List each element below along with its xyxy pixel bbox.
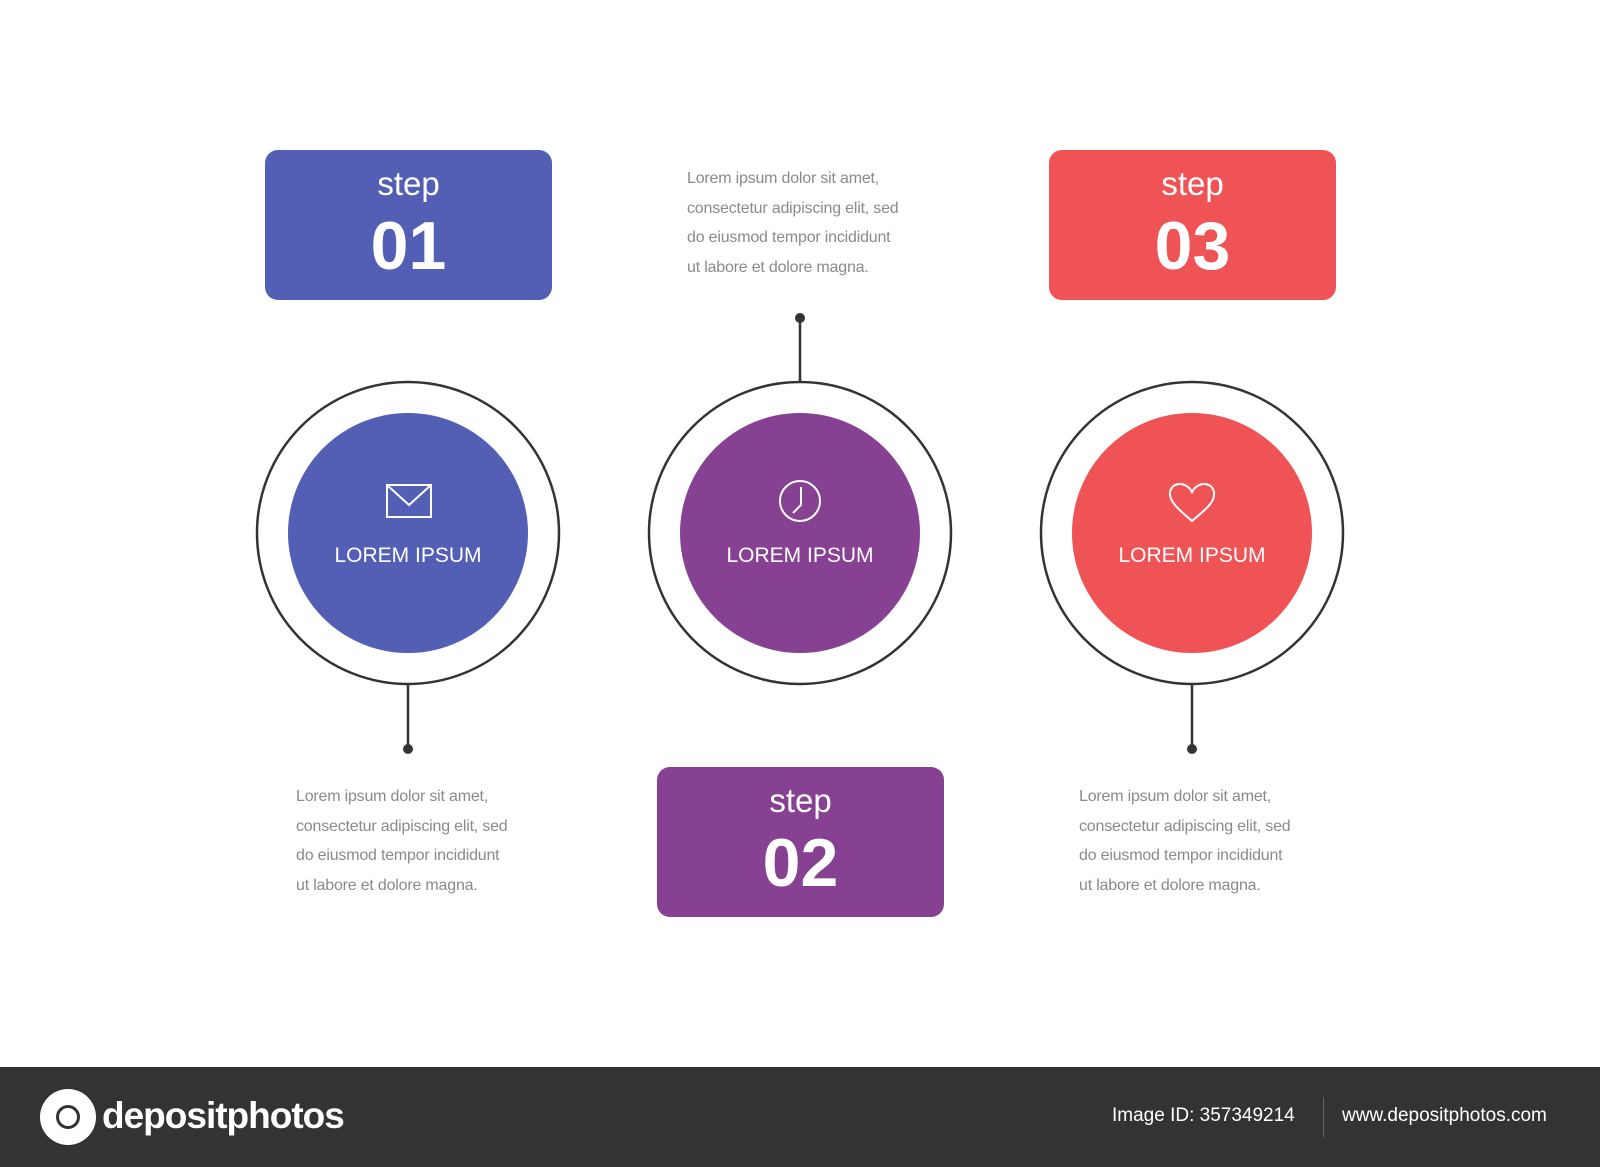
circle 1 <box>257 382 559 754</box>
step 01 box <box>265 150 552 300</box>
circle 2: LOREM IPSUM <box>726 544 874 567</box>
logo: depositphotos <box>102 1095 344 1136</box>
circle 3 <box>1041 382 1343 754</box>
text: right bottom: Lorem ipsum dolor sit amet, <box>1079 788 1271 805</box>
text: middle top: ut labore et dolore magna. <box>687 258 869 276</box>
text: right bottom <box>1079 788 1290 894</box>
text: right bottom: do eiusmod tempor incididunt <box>1079 847 1282 864</box>
text: middle top: do eiusmod tempor incididunt <box>687 229 890 246</box>
text: left bottom: consectetur adipiscing elit, sed <box>296 818 508 834</box>
text: left bottom: do eiusmod tempor incididunt <box>296 847 499 864</box>
step 01 box: step <box>377 165 440 202</box>
image id: Image ID: 357349214 <box>1112 1105 1295 1126</box>
text: right bottom: consectetur adipiscing elit, sed <box>1079 818 1290 834</box>
step 01 box: 01 <box>371 208 446 284</box>
text: middle top <box>687 170 898 276</box>
url: www.depositphotos.com <box>1342 1105 1547 1126</box>
step 03 box: 03 <box>1155 208 1230 284</box>
step 03 box <box>1049 150 1336 300</box>
logo <box>40 1089 344 1145</box>
step 02 box <box>657 767 944 917</box>
text: middle top: Lorem ipsum dolor sit amet, <box>687 170 879 187</box>
footer bar <box>0 1067 1600 1167</box>
text: left bottom: Lorem ipsum dolor sit amet, <box>296 788 488 805</box>
text: right bottom: ut labore et dolore magna. <box>1079 876 1261 894</box>
circle 1: LOREM IPSUM <box>334 544 482 567</box>
text: middle top: consectetur adipiscing elit, sed <box>687 200 898 216</box>
circle 3: LOREM IPSUM <box>1118 544 1266 567</box>
step 03 box: step <box>1161 165 1224 202</box>
step 02 box: step <box>769 782 832 819</box>
text: left bottom <box>296 788 508 894</box>
step 02 box: 02 <box>763 825 838 901</box>
circle 2 <box>649 313 951 684</box>
text: left bottom: ut labore et dolore magna. <box>296 876 478 894</box>
